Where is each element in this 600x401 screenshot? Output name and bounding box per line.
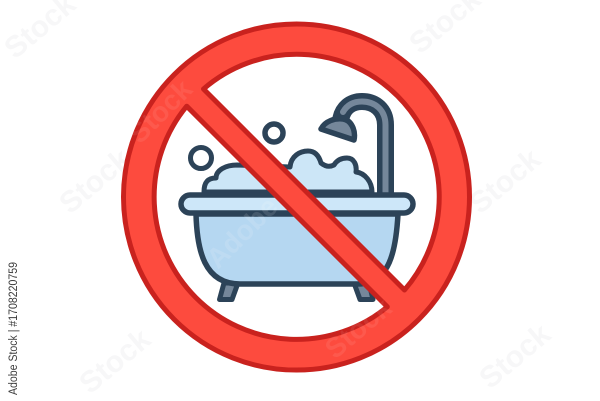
icon: shower pipe and head bbox=[321, 102, 386, 194]
stock watermarks: Stock bbox=[463, 142, 547, 220]
icon: top bubble bbox=[265, 124, 283, 142]
stock watermarks: Stock bbox=[53, 142, 137, 220]
icon: tub body bbox=[196, 214, 398, 284]
stock watermarks: Stock bbox=[73, 322, 157, 400]
ring watermark: Stock bbox=[319, 292, 398, 365]
icon: right foot bbox=[354, 283, 373, 300]
tub watermark: Adobe bbox=[200, 191, 284, 274]
bathtub illustration bbox=[181, 102, 413, 300]
prohibition sign bbox=[123, 24, 469, 370]
icon: left bubble bbox=[190, 148, 212, 168]
icon: tub rim bbox=[181, 195, 413, 213]
vertical credit text: Adobe Stock | #1708220759 bbox=[8, 262, 20, 395]
icon: foam bbox=[204, 151, 372, 192]
stock watermarks: Stock bbox=[473, 317, 557, 395]
ring watermark: Stock bbox=[122, 73, 198, 149]
icon: left foot bbox=[220, 283, 238, 300]
ring watermark bbox=[122, 73, 398, 365]
